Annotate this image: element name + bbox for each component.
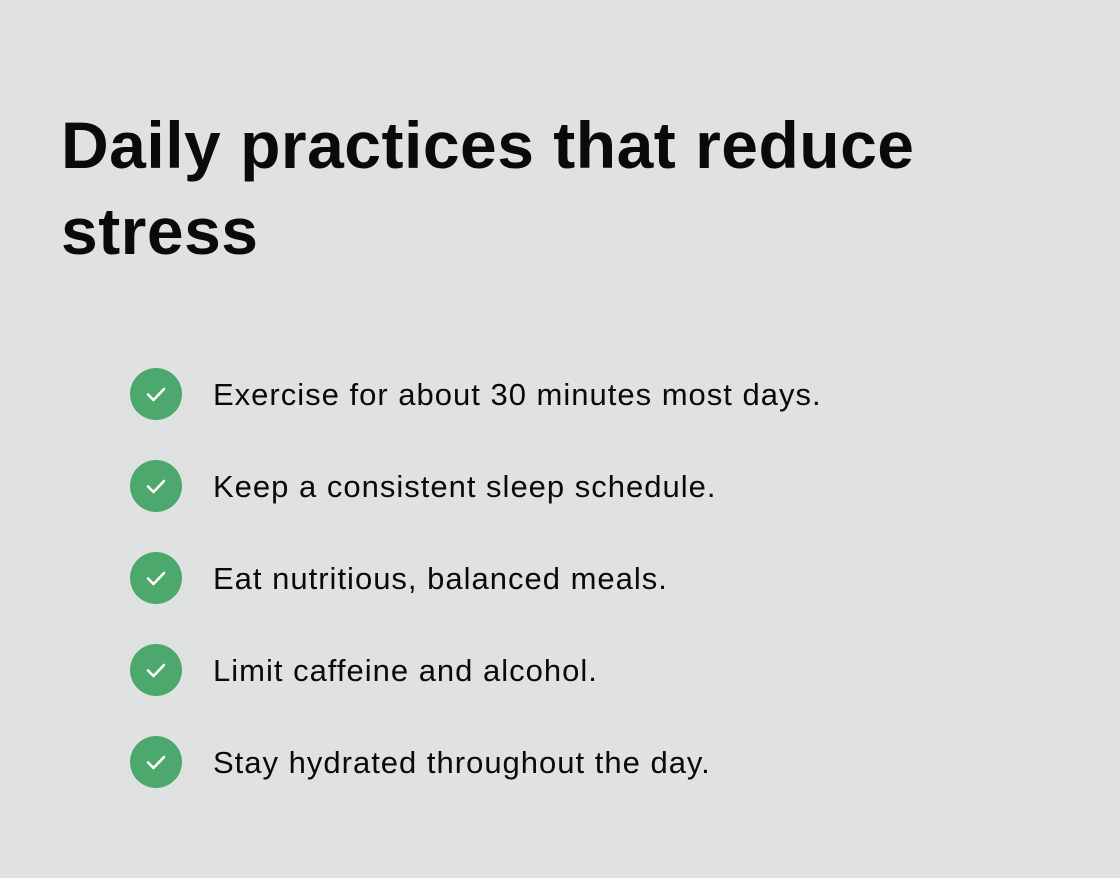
item: caffeine: Limit caffeine and alcohol. — [213, 653, 598, 688]
item: sleep — [130, 460, 716, 512]
checklist — [130, 368, 822, 788]
title: stress — [61, 194, 258, 268]
title: Daily practices that reduce — [61, 108, 915, 182]
item: meals — [130, 552, 668, 604]
item: exercise — [130, 368, 822, 420]
item: caffeine — [130, 644, 598, 696]
item: hydration: Stay hydrated throughout the day. — [213, 745, 711, 780]
item: sleep: Keep a consistent sleep schedule. — [213, 469, 716, 504]
item: hydration — [130, 736, 711, 788]
item: exercise: Exercise for about 30 minutes most days. — [213, 377, 822, 412]
item: meals: Eat nutritious, balanced meals. — [213, 561, 668, 596]
title — [61, 108, 915, 268]
